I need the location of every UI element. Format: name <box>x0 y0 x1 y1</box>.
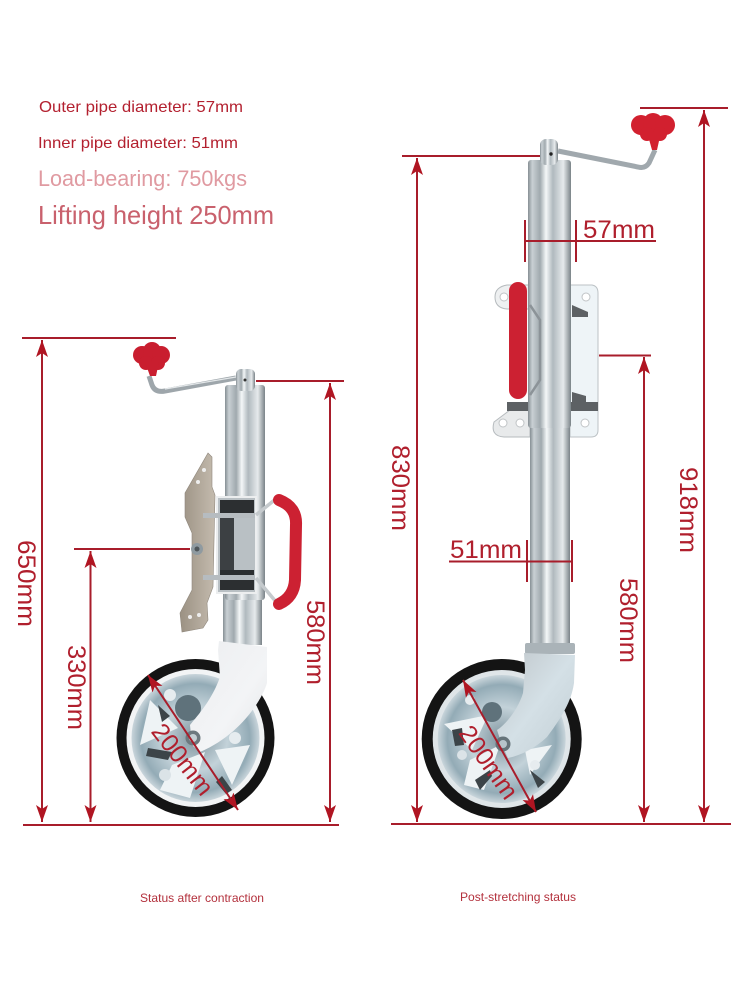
inner pipe diameter: Inner pipe diameter: 51mm <box>38 135 238 152</box>
crank handle <box>558 150 655 168</box>
lower inner pipe <box>223 590 262 645</box>
arrow 580mm <box>329 383 331 822</box>
crank handle <box>149 376 236 391</box>
wheel <box>422 659 582 819</box>
inner pipe <box>530 425 570 650</box>
clamp bracket <box>203 497 256 593</box>
hub nut <box>496 736 510 752</box>
label 51mm: 51mm <box>450 536 522 564</box>
red knob <box>631 113 675 150</box>
mount line, 330mm <box>74 548 190 550</box>
load-bearing: Load-bearing: 750kgs <box>38 166 247 191</box>
51mm bracket <box>449 540 572 582</box>
arrow 200mm wheel diameter <box>463 680 536 812</box>
top line, 650mm <box>22 337 176 339</box>
right dimension lines <box>391 108 731 824</box>
red handle <box>518 291 540 395</box>
left dimension labels <box>12 540 329 801</box>
arrow 330mm <box>90 551 92 822</box>
red handle <box>256 498 296 604</box>
specification text block <box>38 99 274 230</box>
outer pipe <box>225 385 265 600</box>
baseline <box>23 824 339 826</box>
fork collar <box>525 643 575 654</box>
outer pipe <box>528 160 571 428</box>
arrow 580mm <box>643 357 645 822</box>
top line, 580mm <box>256 380 344 382</box>
mounting plate <box>180 453 215 632</box>
wheel <box>116 659 274 817</box>
label 200mm: 200mm <box>453 720 524 805</box>
arrow 650mm <box>41 340 43 822</box>
right dimension labels <box>386 216 702 805</box>
top line, 830mm <box>402 155 540 157</box>
hub nut <box>186 730 200 746</box>
caption: stretched: Post-stretching status <box>460 890 576 904</box>
label 580mm: 580mm <box>301 600 329 685</box>
label 57mm: 57mm <box>583 216 655 244</box>
mount line, 580mm <box>599 354 651 356</box>
arrow 200mm wheel diameter <box>148 675 238 810</box>
label 200mm: 200mm <box>146 718 219 801</box>
contracted jack photo <box>116 342 296 817</box>
label 918mm: 918mm <box>674 467 702 553</box>
mounting plate <box>493 285 598 437</box>
caption: contracted: Status after contraction <box>140 891 264 905</box>
left dimension lines <box>22 338 344 825</box>
red knob <box>133 342 170 376</box>
top line, 918mm <box>640 107 728 109</box>
top collar <box>236 369 255 391</box>
extended jack photo <box>422 113 675 819</box>
lifting height: Lifting height 250mm <box>38 200 274 230</box>
fork arm <box>190 641 267 752</box>
fork arm <box>497 653 575 758</box>
label 580mm: 580mm <box>614 578 642 663</box>
label 650mm: 650mm <box>12 540 40 627</box>
top collar <box>540 139 558 165</box>
57mm bracket <box>525 220 656 262</box>
baseline <box>391 823 731 825</box>
arrow 918mm <box>703 110 705 822</box>
label 330mm: 330mm <box>62 645 90 730</box>
arrow 830mm <box>416 158 418 822</box>
label 830mm: 830mm <box>386 445 414 531</box>
outer pipe diameter: Outer pipe diameter: 57mm <box>39 99 243 116</box>
